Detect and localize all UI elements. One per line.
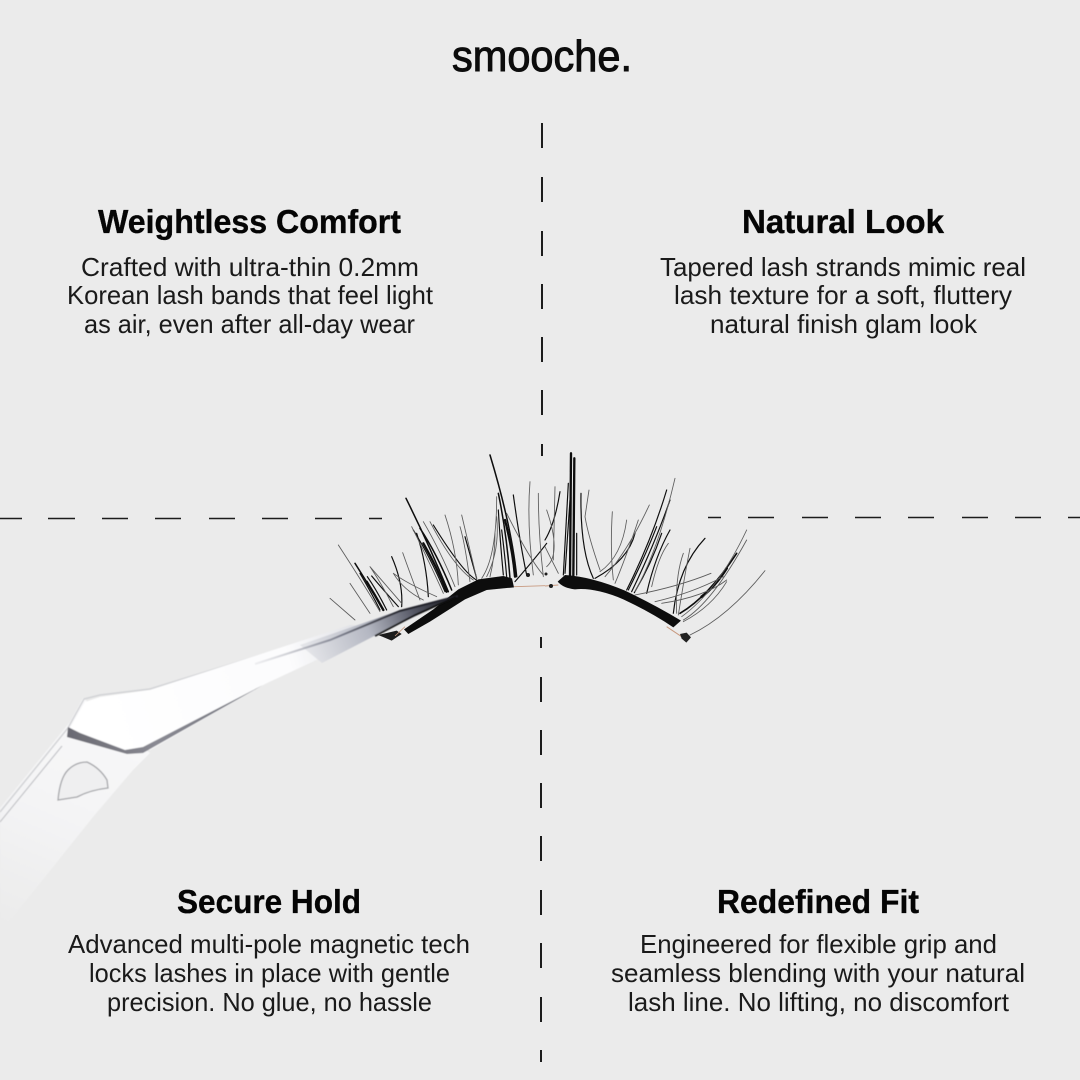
heading: redefined fit: Redefined Fit <box>717 883 919 920</box>
illustration: magnetic lash <box>330 453 765 643</box>
heading: weightless comfort: Weightless Comfort <box>98 203 401 240</box>
copper thread: right <box>545 585 682 637</box>
dashed vertical divider <box>541 123 542 1062</box>
panel: secure hold <box>68 883 470 1017</box>
text: secure hold description <box>68 929 470 1017</box>
text: redefined fit description: Engineered for flexible grip and <box>640 929 997 959</box>
panel: weightless comfort <box>67 203 434 339</box>
lash end knot <box>680 633 691 643</box>
tweezers lower body <box>0 698 150 933</box>
tweezers black edge <box>375 597 456 636</box>
text: secure hold description: Advanced multi-pole magnetic tech <box>68 929 470 959</box>
tweezers shadow stripe <box>67 685 263 754</box>
dashed horizontal divider <box>0 518 1080 519</box>
text: redefined fit description: seamless blending with your natural <box>611 958 1025 988</box>
lash band tip <box>378 631 402 641</box>
tweezers dark streak <box>255 596 458 664</box>
lash band: right <box>558 575 681 627</box>
text: redefined fit description <box>611 929 1025 1017</box>
text: natural look description: lash texture for a soft, fluttery <box>674 280 1012 310</box>
panel: natural look <box>660 203 1026 339</box>
lash: left half <box>330 455 547 641</box>
tweezers outer edge <box>0 652 270 812</box>
text: weightless comfort description: as air, even after all-day wear <box>84 309 415 339</box>
heading: natural look: Natural Look <box>742 203 945 240</box>
logo: smooche. <box>452 32 632 81</box>
text: secure hold description: locks lashes in place with gentle <box>89 958 450 988</box>
copper thread: left <box>395 586 545 636</box>
lash band: left <box>404 576 514 634</box>
tweezers arm face <box>70 625 385 752</box>
center knots <box>526 572 553 588</box>
text: secure hold description: precision. No glue, no hassle <box>107 987 432 1017</box>
text: natural look description: Tapered lash strands mimic real <box>660 252 1026 282</box>
heading: secure hold: Secure Hold <box>177 883 361 920</box>
lash: right half <box>545 453 765 643</box>
text: redefined fit description: lash line. No lifting, no discomfort <box>628 987 1010 1017</box>
illustration: tweezers <box>0 596 458 933</box>
panel: redefined fit <box>611 883 1025 1017</box>
text: weightless comfort description: Korean lash bands that feel light <box>67 280 434 310</box>
text: natural look description: natural finish glam look <box>710 309 978 339</box>
text: weightless comfort description <box>67 252 434 339</box>
text: natural look description <box>660 252 1026 339</box>
tweezers tip lower <box>300 596 458 663</box>
text: weightless comfort description: Crafted with ultra-thin 0.2mm <box>81 252 419 282</box>
tweezers hinge detail <box>58 762 108 800</box>
tweezers inner edge <box>0 746 62 822</box>
